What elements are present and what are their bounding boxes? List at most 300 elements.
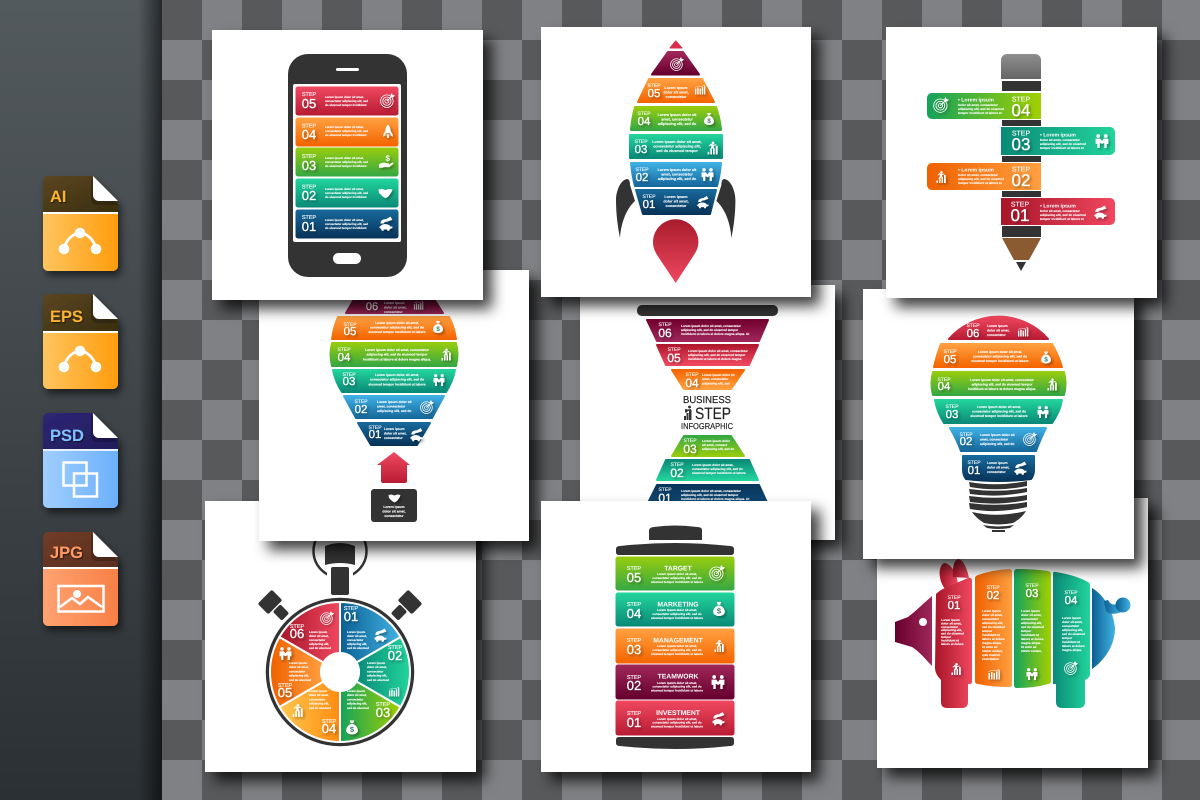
stopwatch labels: Lorem ipsum <box>309 689 327 693</box>
rocket labels: sed do eiusmod tempor <box>656 149 698 153</box>
stopwatch labels: 05 <box>278 685 292 700</box>
bulb labels: Lorem ipsum dolor sit amet, consectetur <box>365 348 429 352</box>
panel: stopwatch <box>205 501 476 772</box>
rocket labels: dolor sit amet, <box>663 91 689 95</box>
bulb labels: 05 <box>344 326 356 338</box>
battery bars: STEP <box>627 638 642 644</box>
step bars: Lorem ipsum dolor sit amet, <box>325 187 364 191</box>
rocket flame <box>653 219 698 283</box>
rocket labels: STEP <box>637 111 651 117</box>
stopwatch labels: 01 <box>344 609 358 624</box>
pencil step 03 <box>1001 127 1115 155</box>
icon: JPG file <box>43 532 118 626</box>
pig labels: adipiscing elit, <box>982 621 1003 625</box>
battery bars: consectetur adipiscing elit, sed do <box>652 648 702 652</box>
battery bars: 05 <box>627 570 641 585</box>
panel: inverted bulb with arrow <box>259 270 529 541</box>
battery bars: Lorem ipsum dolor sit amet, <box>657 608 697 612</box>
stopwatch labels: adipiscing elit, <box>309 642 329 646</box>
stopwatch labels: dolor sit amet, <box>289 665 309 669</box>
stopwatch labels: adipiscing elit, <box>309 702 329 706</box>
stopwatch labels: STEP <box>290 624 305 630</box>
stopwatch labels: adipiscing elit, <box>347 702 367 706</box>
light bulb labels: Lorem ipsum dolor sit amet, <box>978 350 1022 354</box>
pig labels: labore et dolore <box>1062 644 1085 648</box>
rocket labels: consectetur <box>666 204 687 208</box>
battery bars: eiusmod tempor incididunt ut labore <box>651 724 703 728</box>
rocket labels: 04 <box>638 116 651 128</box>
bulb labels: adipiscing elit, sed do eiusmod tempor <box>366 353 428 357</box>
stopwatch labels: sed do eiusmod <box>367 678 389 682</box>
light bulb labels: Lorem ipsum dolor sit amet, consectetur <box>970 378 1034 382</box>
step bars: Lorem ipsum dolor sit amet, <box>325 95 364 99</box>
rocket labels: consectetur <box>666 95 687 99</box>
step bars: consectetur adipiscing elit, sed <box>325 160 368 164</box>
pencil step 03: tempor incididunt ut labore et <box>1040 146 1084 150</box>
pencil step 02: Dolor sit amet, consectetur <box>958 173 998 177</box>
pencil step 02: 02 <box>1012 171 1030 190</box>
light bulb labels <box>937 323 1057 477</box>
pig labels: dolor sit amet, <box>941 621 962 625</box>
light bulb labels: 01 <box>968 465 980 477</box>
light bulb labels: 03 <box>946 409 958 421</box>
light bulb bands <box>932 317 1066 481</box>
pencil step 01 <box>1001 198 1115 225</box>
pencil body <box>1001 54 1041 271</box>
hourglass labels: sit amet, consect <box>702 443 727 447</box>
icon: PSD file <box>43 413 118 508</box>
light bulb labels: consectetur <box>987 470 1006 474</box>
battery bars: STEP <box>627 675 642 681</box>
rocket labels: STEP <box>634 139 648 145</box>
hourglass labels: Lorem ipsum dolor sit amet, consectetur <box>681 489 741 493</box>
light bulb labels: consectetur <box>987 333 1006 337</box>
battery bars: eiusmod tempor incididunt ut labore <box>651 580 703 584</box>
hourglass title <box>681 395 733 431</box>
hourglass labels: 06 <box>658 326 672 340</box>
battery bars: consectetur adipiscing elit, sed do <box>652 576 702 580</box>
icon: AI file <box>43 176 118 271</box>
stopwatch labels: 04 <box>322 721 336 736</box>
pencil step 03: Dolor sit amet, consectetur <box>1040 138 1080 142</box>
hourglass labels: Lorem ipsum dolor <box>702 439 730 443</box>
stopwatch labels: consectetur <box>347 638 364 642</box>
rocket labels: STEP <box>635 167 649 173</box>
pencil step 04: tempor incididunt ut labore et <box>958 111 1002 115</box>
light bulb labels: STEP <box>966 323 980 329</box>
bulb labels: Lorem ipsum dolor sit <box>377 400 412 404</box>
battery bars: 01 <box>627 715 641 730</box>
light bulb screw base <box>969 481 1027 532</box>
pencil step 01: 01 <box>1011 206 1029 225</box>
light bulb labels: 05 <box>944 354 956 366</box>
rocket nose <box>652 41 699 74</box>
battery bars: 02 <box>627 678 641 693</box>
light bulb labels: Lorem ipsum <box>987 324 1008 328</box>
light bulb labels: amet, consectetur <box>980 438 1009 442</box>
bulb labels: dolor sit amet, <box>384 432 407 436</box>
bulb labels: Lorem ipsum <box>384 301 405 305</box>
light bulb labels: 02 <box>960 436 972 448</box>
step bars: STEP <box>302 124 317 130</box>
caption box: consectetur <box>384 514 404 518</box>
pig labels: minim veniam, <box>982 649 1003 653</box>
light bulb labels: consectetur adipiscing elit, sed do <box>973 355 1027 359</box>
bulb labels: consectetur adipiscing elit, sed do <box>370 326 424 330</box>
stopwatch labels: STEP <box>344 606 359 612</box>
pig rear and tail <box>1092 588 1130 669</box>
battery bars: Lorem ipsum dolor sit amet, <box>657 572 697 576</box>
battery bars: TEAMWORK <box>658 674 698 680</box>
battery bottom cap <box>616 737 734 749</box>
pig labels: consectetur <box>1062 624 1080 628</box>
pig labels: 04 <box>1065 595 1078 607</box>
pig labels: dolor sit amet, <box>1062 620 1083 624</box>
step bars: consectetur adipiscing elit, sed <box>325 222 368 226</box>
hourglass labels: adipiscing elit, sed <box>702 381 730 385</box>
pig labels: consectetur <box>982 617 1000 621</box>
stopwatch labels: dolor sit amet, <box>309 634 329 638</box>
panel: phone <box>212 30 483 300</box>
pencil step 01: Dolor sit amet, consectetur <box>1040 209 1080 213</box>
hourglass labels: STEP <box>658 487 672 493</box>
caption box: Lorem ipsum <box>383 505 405 509</box>
stopwatch wheel segments <box>270 602 410 742</box>
pig labels: magna aliqua. <box>982 641 1002 645</box>
pencil step 01: • Lorem ipsum <box>1040 204 1076 210</box>
pig labels: incididunt ut <box>941 638 959 642</box>
pencil step 04: Dolor sit amet, consectetur <box>958 103 998 107</box>
hourglass labels: STEP <box>683 438 697 444</box>
pig labels: sed do eiusmod <box>941 632 964 636</box>
battery bars: TARGET <box>664 566 693 572</box>
light bulb labels: incididunt ut labore et dolore magna aliqua. <box>968 387 1036 391</box>
pig rear band teal <box>1053 572 1090 708</box>
pig snout <box>895 596 932 666</box>
light bulb labels: eiusmod tempor incididunt ut labore <box>971 359 1029 363</box>
hourglass labels: incididunt ut labore et dolore magna aliqua. Ut <box>681 332 749 336</box>
stopwatch case <box>258 524 422 744</box>
stopwatch labels: consectetur <box>309 697 326 701</box>
icon: PSD file: PSD <box>50 427 84 445</box>
rocket labels: consectetur adipiscing elit, <box>653 145 701 149</box>
bulb labels: eiusmod tempor incididunt ut labore <box>368 382 426 386</box>
hourglass labels: 01 <box>658 491 672 505</box>
battery bars: INVESTMENT <box>656 710 701 717</box>
rocket labels: 02 <box>636 172 648 184</box>
caption box: dolor sit amet, <box>382 510 406 514</box>
pig front band with ears <box>935 559 972 708</box>
panel: rocket <box>541 27 811 297</box>
pencil step 04: • Lorem ipsum <box>958 98 994 104</box>
pig labels: incididunt ut <box>1062 640 1080 644</box>
hourglass labels: STEP <box>658 322 672 328</box>
stopwatch labels: sed do eiusmod <box>309 646 331 650</box>
icon: JPG file: JPG <box>50 544 83 562</box>
battery bars: consectetur adipiscing elit, sed do <box>652 612 702 616</box>
stopwatch labels: dolor sit amet, <box>347 693 367 697</box>
hourglass title: INFOGRAPHIC <box>681 421 733 431</box>
pencil step 02 <box>927 163 1041 190</box>
bulb labels: 04 <box>338 352 351 364</box>
pencil step 03: • Lorem ipsum <box>1040 132 1076 138</box>
light bulb labels: Lorem ipsum dolor sit amet, <box>977 405 1021 409</box>
bulb labels: STEP <box>342 372 356 378</box>
stopwatch labels <box>278 606 403 736</box>
stopwatch labels: Lorem ipsum <box>367 661 385 665</box>
pig labels: Ut enim ad <box>982 645 998 649</box>
hourglass labels: Lorem ipsum dolor sit amet, consectetur <box>681 324 741 328</box>
battery bars: STEP <box>627 711 642 717</box>
light bulb labels: dolor sit amet, <box>987 466 1010 470</box>
stopwatch labels: Lorem ipsum <box>309 630 327 634</box>
step bars: 03 <box>302 158 316 173</box>
pencil step 03: 03 <box>1012 135 1030 154</box>
stopwatch labels: 03 <box>376 705 390 720</box>
stopwatch labels: consectetur <box>309 638 326 642</box>
rocket labels: STEP <box>647 83 661 89</box>
bulb labels: STEP <box>354 399 368 405</box>
pig labels: adipiscing elit, <box>1062 628 1083 632</box>
pig labels <box>941 583 1085 680</box>
battery bars: Lorem ipsum dolor sit amet, <box>657 717 697 721</box>
bulb labels: STEP <box>343 322 357 328</box>
light bulb labels: consectetur adipiscing elit, sed do <box>972 410 1026 414</box>
pig labels: tempor <box>1021 629 1032 633</box>
pencil step 01: tempor incididunt ut labore et <box>1040 217 1084 221</box>
bulb labels: amet, consectetur <box>377 405 406 409</box>
pig labels: minim veniam, <box>1021 649 1042 653</box>
stopwatch labels: sed do eiusmod <box>347 706 369 710</box>
rocket labels: 03 <box>635 144 647 156</box>
pig labels: 02 <box>987 590 999 602</box>
battery bars: 04 <box>627 606 641 621</box>
panel: light bulb <box>863 289 1134 559</box>
pig labels: consectetur <box>1021 617 1039 621</box>
icon: AI file: AI <box>50 188 66 206</box>
pig labels: labore et dolore <box>982 637 1005 641</box>
pig labels: tempor <box>941 635 952 639</box>
light bulb labels: 06 <box>967 328 979 340</box>
pencil step 03: adipiscing elit, sed do eiusmod <box>1040 142 1086 146</box>
rocket labels: STEP <box>642 194 656 200</box>
bulb labels: 03 <box>343 376 355 388</box>
panel: pencil <box>886 27 1157 298</box>
hourglass labels: 05 <box>667 351 681 365</box>
pig labels: Ut enim ad <box>1021 645 1037 649</box>
stopwatch labels: sed do eiusmod <box>309 706 331 710</box>
hourglass labels: Lorem ipsum dolor sit amet, <box>692 463 733 467</box>
step bars: 05 <box>302 96 316 111</box>
rocket labels: 05 <box>648 88 660 100</box>
pig labels: exercitation <box>982 657 999 661</box>
step bars: STEP <box>302 215 317 221</box>
hourglass bands <box>646 320 769 530</box>
stopwatch labels: Lorem ipsum <box>347 689 365 693</box>
stopwatch labels: dolor sit amet, <box>347 634 367 638</box>
rocket labels: Lorem ipsum <box>664 195 688 199</box>
stopwatch labels: sed do eiusmod <box>347 646 369 650</box>
step bars: Lorem ipsum dolor sit amet, <box>325 125 364 129</box>
panel: hourglass <box>580 285 835 540</box>
stopwatch labels: dolor sit amet, <box>309 693 329 697</box>
step bars: Lorem ipsum dolor sit amet, <box>325 218 364 222</box>
rocket labels <box>634 83 718 211</box>
hourglass labels: 03 <box>683 442 697 456</box>
light bulb labels: adipiscing elit, sed do eiusmod tempor <box>971 383 1033 387</box>
phone body <box>288 54 407 277</box>
hourglass labels: adipiscing elit, sed do eiusmod tempor <box>688 353 746 357</box>
light bulb labels: adipiscing elit, sed do <box>980 442 1014 446</box>
light bulb labels: dolor sit amet, <box>987 329 1010 333</box>
light bulb labels: Lorem ipsum <box>987 461 1008 465</box>
pig labels: tempor <box>982 629 993 633</box>
caption box <box>371 489 417 522</box>
battery bars: MANAGEMENT <box>653 638 704 644</box>
rocket labels: dolor sit amet, <box>663 200 689 204</box>
bulb labels <box>337 301 451 441</box>
step bars <box>296 87 398 238</box>
hourglass labels: 04 <box>685 376 699 390</box>
step bars: do eiusmod tempor incididunt <box>325 133 366 137</box>
stopwatch labels: Lorem ipsum <box>347 630 365 634</box>
hourglass labels: amet, consectetur <box>702 377 729 381</box>
battery bars: STEP <box>627 602 642 608</box>
battery bars <box>616 557 734 735</box>
panel: battery <box>541 501 811 772</box>
step bars: do eiusmod tempor incididunt <box>325 195 366 199</box>
bulb labels: Lorem ipsum <box>384 427 405 431</box>
stopwatch labels: consectetur <box>289 669 306 673</box>
bulb labels: dolor sit amet, <box>384 306 407 310</box>
pig labels: STEP <box>947 595 961 601</box>
pig labels: sed do eiusmod <box>1021 625 1044 629</box>
rocket labels: 01 <box>643 199 655 211</box>
pig labels: sed do eiusmod <box>1062 632 1085 636</box>
bulb labels: adipiscing elit, sed do <box>377 409 411 413</box>
pig middle band green <box>1014 569 1051 688</box>
stopwatch labels: dolor sit amet, <box>367 665 387 669</box>
light bulb labels: eiusmod tempor incididunt ut labore <box>970 414 1028 418</box>
icon: EPS file <box>43 294 118 389</box>
pencil step 04: STEP <box>1012 96 1030 104</box>
step bars: do eiusmod tempor incididunt <box>325 164 366 168</box>
bulb labels: 01 <box>369 429 381 441</box>
hourglass labels: Lorem ipsum dolor sit <box>702 373 734 377</box>
bulb bands <box>330 296 458 445</box>
bulb labels: Lorem ipsum dolor sit amet, <box>375 321 419 325</box>
pig labels: incididunt ut <box>982 633 1000 637</box>
light bulb labels: 04 <box>938 381 951 393</box>
pencil step 04: adipiscing elit, sed do eiusmod <box>958 107 1004 111</box>
rocket fins <box>616 179 735 238</box>
panel: piggy bank <box>877 498 1148 768</box>
battery bars: 03 <box>627 642 641 657</box>
pig labels: adipiscing elit, <box>941 628 962 632</box>
step bars: STEP <box>302 92 317 98</box>
stopwatch labels: STEP <box>388 645 403 651</box>
pencil step 02: • Lorem ipsum <box>958 168 994 174</box>
rocket labels: amet, consectetur <box>661 118 693 122</box>
battery bars: Lorem ipsum dolor sit amet, <box>657 681 697 685</box>
light bulb labels: STEP <box>937 377 951 383</box>
battery bars: eiusmod tempor incididunt ut labore <box>651 688 703 692</box>
pencil step 02: tempor incididunt ut labore et <box>958 181 1002 185</box>
step bars: 02 <box>302 188 316 203</box>
pencil step 04 <box>927 93 1041 120</box>
panel: left sidebar <box>0 0 162 800</box>
bulb labels: eiusmod tempor incididunt ut labore <box>368 330 426 334</box>
hourglass labels: adipiscing elit, sed do eiusmod tempor <box>681 328 739 332</box>
pig labels: labore et dolore <box>941 642 964 646</box>
pencil step 02: STEP <box>1012 166 1030 174</box>
step bars: Lorem ipsum dolor sit amet, <box>325 156 364 160</box>
pencil step 04: 04 <box>1012 101 1030 120</box>
pig labels: adipiscing elit, <box>1021 621 1042 625</box>
hourglass labels: STEP <box>670 462 684 468</box>
pig labels: magna aliqua. <box>1021 641 1041 645</box>
step bars: STEP <box>302 184 317 190</box>
stopwatch labels: STEP <box>278 683 293 689</box>
pig labels: Lorem ipsum <box>1021 609 1040 613</box>
pencil step 03: STEP <box>1012 130 1030 138</box>
battery bars: Lorem ipsum dolor sit amet, <box>657 644 697 648</box>
stopwatch labels: adipiscing elit, <box>289 674 309 678</box>
hourglass labels: adipiscing elit, sed do <box>702 447 734 451</box>
rocket labels: adipiscing elit, sed do <box>658 122 697 126</box>
arrow: up <box>377 452 410 483</box>
pig labels: tempor <box>1062 636 1073 640</box>
pig labels: STEP <box>986 585 1000 591</box>
rocket labels: adipiscing elit, sed do <box>658 177 697 181</box>
step bars: do eiusmod tempor incididunt <box>325 226 366 230</box>
stopwatch labels: adipiscing elit, <box>367 674 387 678</box>
stopwatch labels: adipiscing elit, <box>347 642 367 646</box>
hourglass labels: consectetur adipiscing elit, sed do <box>692 467 743 471</box>
pig labels: 01 <box>948 600 960 612</box>
pig labels: 03 <box>1026 588 1038 600</box>
pencil step 02: adipiscing elit, sed do eiusmod <box>958 177 1004 181</box>
hourglass labels: incididunt ut labore et dolore magna aliqua. Ut <box>681 497 749 501</box>
bulb labels: 02 <box>355 404 367 416</box>
stopwatch labels: 06 <box>290 626 304 641</box>
bulb labels: consectetur <box>384 436 403 440</box>
light bulb labels: STEP <box>967 460 981 466</box>
battery top cap <box>616 526 734 555</box>
pig labels: Lorem ipsum <box>941 618 960 622</box>
hourglass labels: STEP <box>667 347 681 353</box>
bulb labels: 06 <box>366 301 378 313</box>
step bars: consectetur adipiscing elit, sed <box>325 191 368 195</box>
rocket labels: Lorem ipsum dolor sit <box>658 168 696 172</box>
light bulb labels: STEP <box>959 432 973 438</box>
step bars: do eiusmod tempor incididunt <box>325 103 366 107</box>
step bars: consectetur adipiscing elit, sed <box>325 99 368 103</box>
pig labels: sed do eiusmod <box>982 625 1005 629</box>
pig labels: incididunt ut <box>1021 633 1039 637</box>
hourglass labels: adipiscing elit, sed do eiusmod tempor <box>681 493 739 497</box>
pig labels: quis nostrud <box>982 653 1000 657</box>
rocket labels: Lorem ipsum dolor sit <box>658 113 696 117</box>
stopwatch labels: STEP <box>322 719 337 725</box>
battery bars: eiusmod tempor incididunt ut labore <box>651 616 703 620</box>
battery bars: MARKETING <box>657 602 699 608</box>
pig labels: dolor sit amet, <box>1021 613 1042 617</box>
pig labels: consectetur <box>941 625 959 629</box>
pig labels: STEP <box>1064 590 1078 596</box>
hourglass top cap <box>637 305 778 316</box>
bulb labels: STEP <box>368 425 382 431</box>
